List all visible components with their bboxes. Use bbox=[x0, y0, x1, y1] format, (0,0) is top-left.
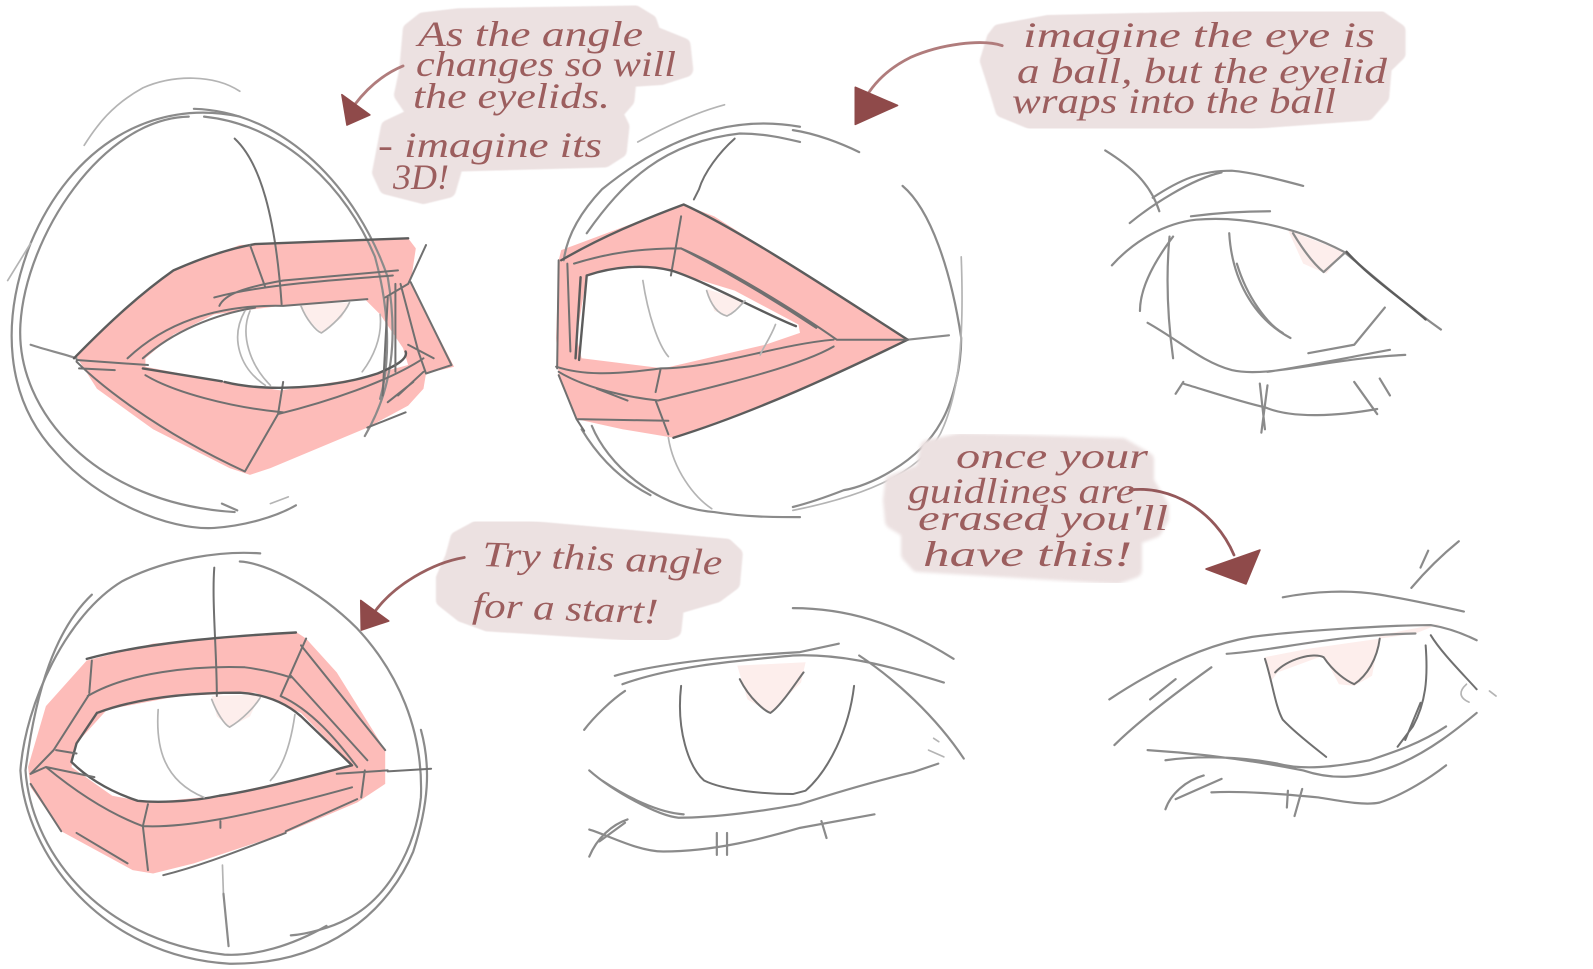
upper lid lines bbox=[1112, 211, 1441, 330]
brow lines bbox=[1105, 150, 1303, 223]
corner marks bbox=[929, 738, 944, 757]
tear-shaped highlight bbox=[212, 694, 260, 727]
iris highlight bbox=[1265, 623, 1441, 686]
callout text: - imagine its bbox=[378, 125, 602, 165]
callout: imagine the eye is a ball bbox=[855, 15, 1398, 124]
lower fold lines bbox=[1176, 379, 1390, 433]
arrow: pointing to third eye bbox=[361, 557, 464, 630]
arrow: pointing to first eye bbox=[342, 66, 403, 125]
eyelid plane lines bbox=[74, 238, 452, 472]
eyelid plane lines bbox=[31, 632, 388, 875]
eyelid plane lines bbox=[556, 204, 908, 438]
lower lid lines bbox=[589, 764, 938, 818]
iris lines bbox=[1140, 233, 1344, 358]
tear-shaped highlight bbox=[1288, 230, 1344, 274]
lower fold lines bbox=[589, 814, 874, 857]
callout text: once your bbox=[956, 436, 1149, 476]
lower lid lines bbox=[1148, 308, 1405, 372]
callout text: As the angle bbox=[415, 14, 643, 54]
callout text: erased you'll bbox=[918, 498, 1168, 538]
bubble background bbox=[988, 17, 1398, 123]
eye sketch: front-facing eye, bottom left bbox=[20, 553, 431, 964]
bubble background bbox=[891, 441, 1161, 576]
lower lid lines bbox=[1148, 713, 1477, 777]
lower fold lines bbox=[1165, 765, 1446, 816]
brow line bbox=[793, 608, 954, 659]
corner marks bbox=[1461, 684, 1496, 702]
callout text: the eyelids. bbox=[413, 76, 610, 116]
tear-shaped highlight bbox=[737, 662, 806, 713]
eyelid pink shape bbox=[77, 238, 454, 475]
iris lines bbox=[1265, 635, 1477, 757]
callout text: 3D! bbox=[392, 157, 449, 197]
callout text: imagine the eye is bbox=[1023, 15, 1375, 55]
callout text bbox=[908, 436, 1168, 574]
bubble background bbox=[380, 14, 685, 196]
tear-shaped highlight bbox=[707, 289, 745, 316]
arrow: pointing to second eye bbox=[855, 43, 1002, 124]
eye sketch: angled eye with eyelid planes, top left bbox=[8, 78, 454, 528]
upper lid lines bbox=[1109, 625, 1477, 745]
iris lines bbox=[680, 672, 854, 794]
callout: try this angle bbox=[361, 527, 735, 635]
callout text: a ball, but the eyelid bbox=[1017, 51, 1388, 91]
callout text bbox=[472, 534, 723, 631]
eyeball guide circles bbox=[8, 78, 393, 528]
callout text: wraps into the ball bbox=[1012, 81, 1336, 121]
eyeball guide circles bbox=[564, 105, 962, 517]
eyelid pink shape bbox=[28, 632, 385, 873]
callout text: have this! bbox=[923, 534, 1132, 574]
callout text: guidlines are bbox=[908, 471, 1135, 511]
callout text: for a start! bbox=[472, 585, 659, 631]
callout: once your guidelines are erased bbox=[891, 436, 1260, 584]
eye sketch: finished eye, bottom right bbox=[1109, 541, 1496, 816]
brow strokes bbox=[1283, 541, 1464, 612]
arrow: pointing to final eye bbox=[1130, 489, 1260, 584]
callout text: changes so will bbox=[416, 44, 676, 84]
eyelid pink shape bbox=[556, 204, 908, 438]
tear-shaped highlight bbox=[298, 303, 349, 333]
eye sketch: side-on eye with eyelid planes, top centre bbox=[556, 105, 962, 517]
callout text bbox=[1012, 15, 1388, 121]
callout: as the angle changes bbox=[342, 14, 685, 197]
callout text bbox=[378, 14, 676, 197]
bubble background bbox=[444, 527, 735, 635]
callout text: Try this angle bbox=[482, 534, 723, 582]
eyeball guide circles bbox=[20, 553, 431, 964]
eye sketch: finished eye, top right bbox=[1105, 150, 1441, 433]
eye sketch: finished eye, bottom centre bbox=[584, 608, 964, 857]
upper lid lines bbox=[584, 644, 964, 759]
